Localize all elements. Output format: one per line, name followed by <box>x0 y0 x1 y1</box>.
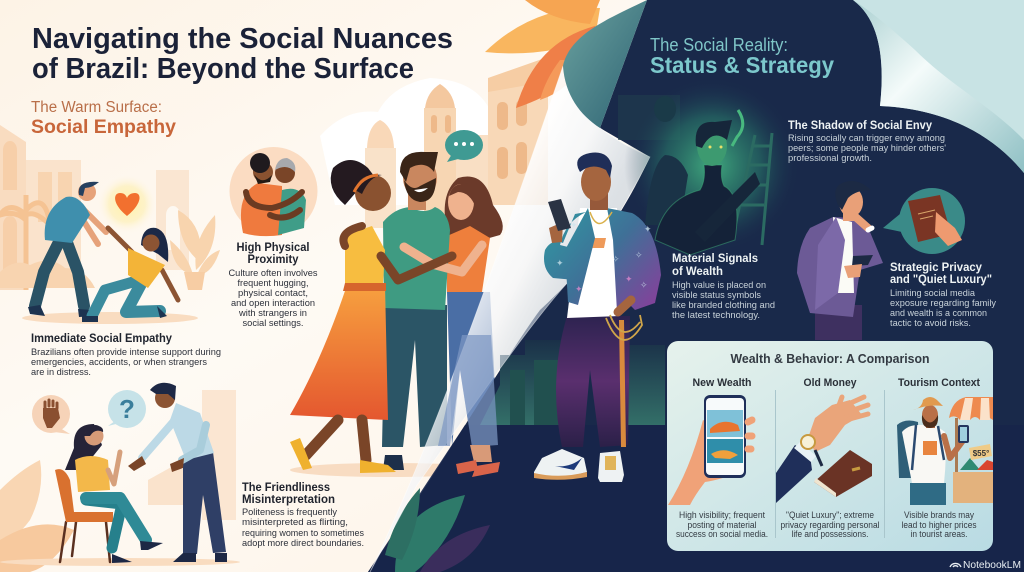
column: tourism context: $55° <box>973 449 989 458</box>
text: material signals of wealth: Material Signals <box>672 253 758 265</box>
helper man <box>28 182 106 317</box>
illustration: man with branded jacket and phone: ✧ <box>640 280 648 290</box>
icon: hugging figures in a circle <box>230 147 318 236</box>
background: orange palm leaves <box>485 0 600 108</box>
text: high physical proximity: High Physical <box>236 242 310 254</box>
text: immediate social empathy <box>31 333 221 378</box>
text: high physical proximity: Culture often involves <box>228 268 318 279</box>
title: of Brazil: Beyond the Surface <box>32 53 414 85</box>
column: new wealth: success on social media. <box>676 529 768 539</box>
text: shadow of social envy: professional growth. <box>788 153 872 164</box>
illustration: envious man and ladder <box>624 77 800 255</box>
illustration: man with branded jacket and phone: ✦ <box>570 220 578 230</box>
text: high physical proximity: physical contact, <box>238 288 308 299</box>
illustration: man hiding face with phone <box>797 181 883 340</box>
text: immediate social empathy: are in distress. <box>31 367 91 378</box>
column: tourism context <box>897 377 993 539</box>
text: the friendliness misinterpretation <box>242 482 364 549</box>
illustration: man with branded jacket and phone: ✧ <box>635 250 643 260</box>
text: high physical proximity <box>228 242 318 329</box>
text: strategic privacy and quiet luxury: tactic to avoid risks. <box>890 318 971 329</box>
text: shadow of social envy: peers; some people may hinder others' <box>788 143 946 154</box>
text: strategic privacy and quiet luxury <box>890 262 996 329</box>
text: the friendliness misinterpretation: Misinterpretation <box>242 494 335 506</box>
centre man <box>382 152 450 470</box>
column: old money: life and possessions. <box>792 529 868 539</box>
panel: wealth and behavior comparison <box>667 341 993 551</box>
illustration: man with branded jacket and phone: ✧ <box>612 254 620 264</box>
background: central church, towers and cloud <box>320 58 548 228</box>
background: dark city skyline <box>368 95 1024 572</box>
logo: notebooklm: NotebookLM <box>963 559 1021 571</box>
illustration: friendliness misinterpretation <box>0 383 240 566</box>
illustration: man with branded jacket and phone <box>534 153 661 482</box>
column: old money: privacy regarding personal <box>780 520 880 530</box>
standing man <box>128 383 227 562</box>
heading: the social reality <box>650 35 834 78</box>
icon: raised hand bubble <box>32 395 70 434</box>
heading: the social reality: Status & Strategy <box>650 52 834 78</box>
column: tourism context: lead to higher prices <box>902 520 977 530</box>
icon: page corner curl <box>853 0 1024 173</box>
illustration: three friends embracing <box>290 130 503 477</box>
text: the friendliness misinterpretation: requiring women to sometimes <box>242 528 364 539</box>
text: material signals of wealth <box>672 253 775 321</box>
text: strategic privacy and quiet luxury: exposure regarding family <box>890 298 996 309</box>
background: tropical leaves on dark <box>385 488 490 572</box>
heading: the warm surface <box>31 99 176 138</box>
column: new wealth: High visibility; frequent <box>679 510 765 520</box>
column: new wealth: New Wealth <box>692 377 752 389</box>
title <box>32 23 453 85</box>
embracing arm of right woman <box>404 245 482 272</box>
text: strategic privacy and quiet luxury: Strategic Privacy <box>890 262 983 274</box>
text: high physical proximity: social settings. <box>242 318 304 329</box>
text: strategic privacy and quiet luxury: and wealth is a common <box>890 308 987 319</box>
text: strategic privacy and quiet luxury: Limiting social media <box>890 288 976 299</box>
text: material signals of wealth: visible status symbols <box>672 290 761 301</box>
column: tourism context: Tourism Context <box>898 377 980 389</box>
icon: question mark bubble: ? <box>119 394 135 424</box>
illustration: helping a fallen stranger <box>22 174 198 324</box>
heading: the warm surface: Social Empathy <box>31 117 176 138</box>
text: material signals of wealth: High value is placed on <box>672 280 766 291</box>
text: high physical proximity: with strangers in <box>238 308 307 319</box>
column: old money: Old Money <box>804 377 857 389</box>
text: shadow of social envy: Rising socially can trigger envy among <box>788 133 945 144</box>
left woman <box>290 160 452 473</box>
kneeling woman <box>82 228 178 322</box>
panel: top right page corner <box>840 0 1024 180</box>
column: new wealth <box>668 377 768 539</box>
illustration: man with branded jacket and phone: ✦ <box>625 274 633 284</box>
text: the friendliness misinterpretation: Politeness is frequently <box>242 507 337 518</box>
right woman <box>445 177 503 447</box>
column: old money <box>776 377 880 539</box>
text: high physical proximity: Proximity <box>248 254 299 266</box>
text: immediate social empathy: emergencies, accidents, or when strangers <box>31 357 207 368</box>
illustration: right woman's lower legs over the dark side <box>438 335 500 477</box>
text: the friendliness misinterpretation: misinterpreted as flirting, <box>242 517 348 528</box>
heading: the social reality: The Social Reality: <box>650 35 788 55</box>
heading: the warm surface: The Warm Surface: <box>31 99 162 116</box>
illustration: man with branded jacket and phone: ✦ <box>644 224 652 234</box>
column: new wealth: posting of material <box>688 520 756 530</box>
background: left colonial buildings and palm <box>0 125 220 290</box>
icon: question mark bubble <box>108 390 146 428</box>
text: shadow of social envy: The Shadow of Social Envy <box>788 120 933 132</box>
text: high physical proximity: and open interaction <box>231 298 315 309</box>
text: strategic privacy and quiet luxury: and "Quiet Luxury" <box>890 274 992 286</box>
illustration: man with branded jacket and phone: ✦ <box>575 284 583 294</box>
text: high physical proximity: frequent hugging, <box>238 278 308 289</box>
card heading: Wealth & Behavior: A Comparison <box>730 352 930 366</box>
text: the friendliness misinterpretation: adopt more direct boundaries. <box>242 538 364 549</box>
text: shadow of social envy <box>788 120 946 164</box>
column: old money: "Quiet Luxury"; extreme <box>786 510 874 520</box>
text: immediate social empathy: Immediate Social Empathy <box>31 333 173 345</box>
title: Navigating the Social Nuances <box>32 23 453 55</box>
panel: dark social reality background <box>368 0 1024 572</box>
illustration: man with branded jacket and phone: ✦ <box>556 258 564 268</box>
text: immediate social empathy: Brazilians often provide intense support during <box>31 347 221 358</box>
text: the friendliness misinterpretation: The Friendliness <box>242 482 330 494</box>
background: monstera leaf bottom left <box>0 460 74 572</box>
text: material signals of wealth: of Wealth <box>672 266 723 278</box>
icon: book in hand bubble <box>883 188 965 254</box>
icon: translucent curling page <box>370 0 650 572</box>
column: tourism context: in tourist areas. <box>910 529 968 539</box>
column: tourism context: Visible brands may <box>904 510 974 520</box>
text: material signals of wealth: the latest technology. <box>672 310 760 321</box>
seated woman on chair <box>55 424 163 563</box>
speech bubble <box>445 130 483 162</box>
text: material signals of wealth: like branded clothing and <box>672 300 775 311</box>
